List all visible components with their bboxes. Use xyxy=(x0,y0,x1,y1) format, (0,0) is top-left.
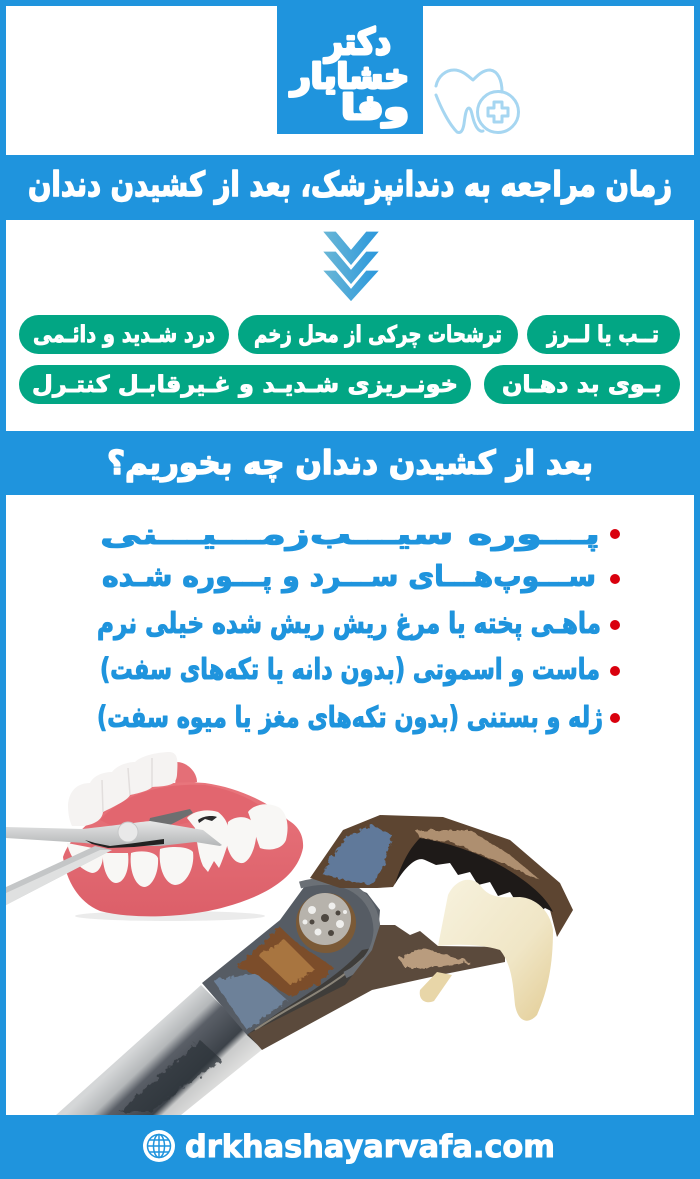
list item 2: ســـوپ‌هـــای ســـرد و پـــوره شـده xyxy=(102,559,596,594)
pill: pain: درد شـدید و دائـمی xyxy=(33,322,215,348)
lower teeth xyxy=(67,804,288,887)
upper teeth xyxy=(68,752,177,826)
logo xyxy=(277,0,423,134)
icon: tooth with plus xyxy=(436,70,518,133)
logo: وفا xyxy=(341,88,409,128)
list: foods xyxy=(97,517,620,734)
pill: bad breath xyxy=(484,365,680,404)
pill: bad breath: بـوی بد دهـان xyxy=(502,372,662,398)
tooth xyxy=(420,880,553,1021)
head xyxy=(202,880,380,1047)
pill: discharge: ترشحات چرکی از محل زخم xyxy=(254,322,502,348)
lower jaw xyxy=(248,925,505,1050)
pill: pain xyxy=(19,315,229,354)
pill: fever: تــب یا لــرز xyxy=(546,322,659,348)
heading: what to eat: بعد از کشیدن دندان چه بخوریم؟ xyxy=(107,443,593,483)
icon: globe xyxy=(143,1130,175,1162)
arrow: triple chevron down xyxy=(322,231,380,302)
rivet xyxy=(296,893,356,953)
upper jaw xyxy=(310,815,573,937)
pill: bleeding xyxy=(19,365,471,404)
pill: fever xyxy=(527,315,680,354)
logo: خشایار xyxy=(289,57,409,97)
illustration: rusty pliers with extracted tooth xyxy=(56,815,573,1115)
list item 1 xyxy=(100,517,620,552)
illustration: denture with forceps xyxy=(6,752,303,921)
logo: دکتر xyxy=(323,22,391,63)
pill: discharge xyxy=(238,315,518,354)
pill: bleeding: خونـریزی شـدیـد و غـیرقابـل کنتـرل xyxy=(32,372,458,398)
handle xyxy=(56,985,264,1115)
list item 1: پـــوره سیـــب‌زمـــیـــنی xyxy=(100,517,600,552)
forceps xyxy=(149,809,193,825)
footer: website: drkhashayarvafa.com xyxy=(185,1129,555,1165)
